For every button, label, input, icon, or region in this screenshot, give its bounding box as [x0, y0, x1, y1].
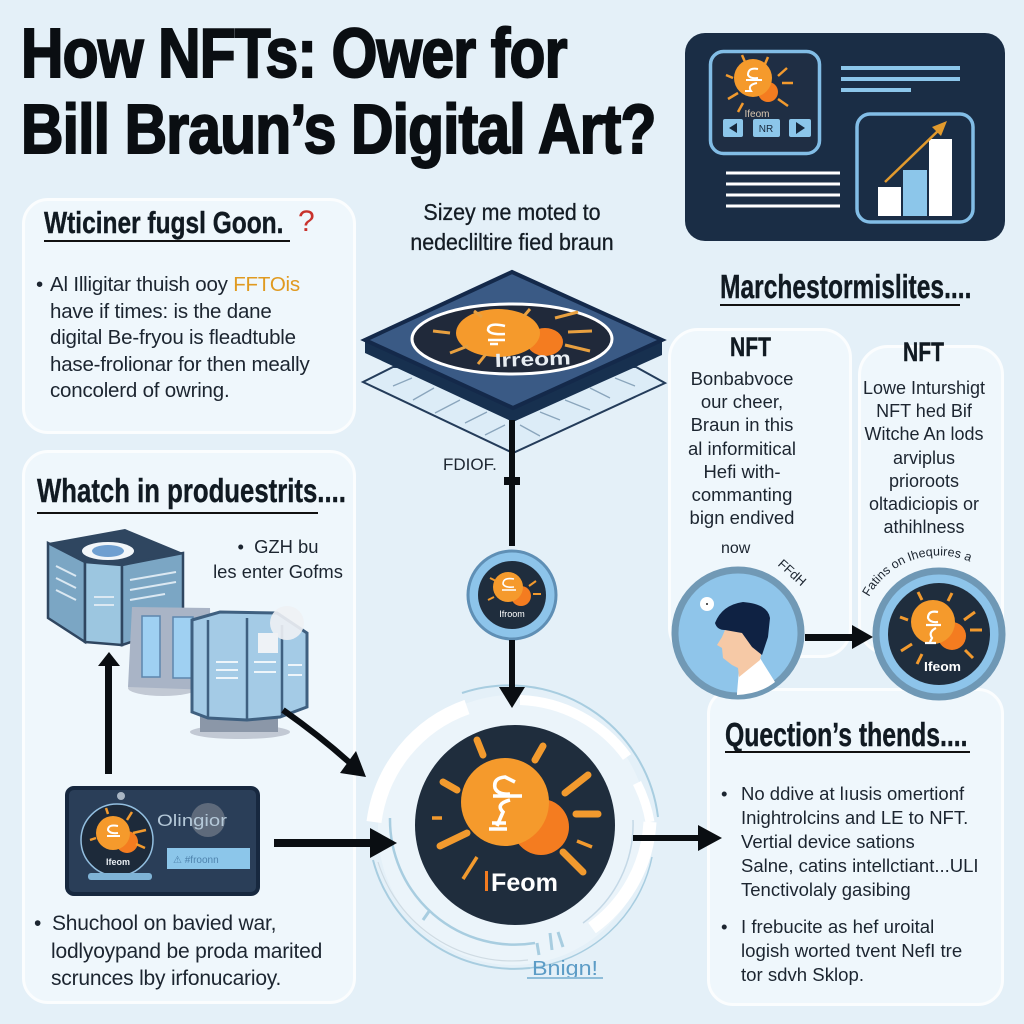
- icon: kiosks: [48, 529, 307, 739]
- question mark: ?: [298, 205, 315, 238]
- icon: medallion small: [468, 551, 556, 639]
- icon: tablet: [67, 788, 258, 894]
- text: question list 1: Inightrolcins and LE to NFT.: [741, 807, 968, 828]
- text: question list 1: No ddive at lıusis omertionf: [741, 783, 964, 804]
- panel: production: [22, 450, 356, 1004]
- icon: central diamond platform: [363, 272, 665, 453]
- icon: main coin with rings: Feom: [491, 869, 558, 897]
- heading: production: Whatch in produestrits....: [37, 472, 346, 509]
- icon: tablet: Olingior: [157, 811, 227, 830]
- text: question list 2: •: [721, 916, 728, 937]
- text NFT left: commanting: [692, 484, 792, 505]
- text NFT right: prioroots: [889, 471, 959, 491]
- text NFT right: NFT hed Bif: [876, 401, 972, 421]
- arrow: medallion to main: [499, 640, 525, 708]
- text: question list 1: [721, 783, 979, 900]
- text NFT left: Bonbabvoce: [691, 368, 793, 389]
- text: definition: Al Illigitar thuish ooy FFTOis: [50, 273, 300, 296]
- heading: center: nedecliltire fied braun: [410, 229, 614, 255]
- text: definition: hase-frolionar for then meally: [50, 352, 310, 376]
- panel: NFT right: [858, 345, 1004, 655]
- label NFT right: NFT: [903, 337, 944, 367]
- icon: tablet: ⚠ #froonn: [173, 855, 219, 866]
- label: bottom ring text: Bnign!: [532, 958, 598, 980]
- text: caption: • GZH bu: [237, 536, 319, 557]
- heading: marketplaces: Marchestormislites....: [720, 268, 971, 305]
- panel: definition: [22, 198, 356, 434]
- icon: bar chart: [857, 114, 973, 222]
- text: production note: [34, 912, 322, 990]
- icon: coin right: Ifeom: [924, 659, 961, 674]
- icon: screen with coin: [710, 52, 820, 154]
- text: question list 1: Salne, catins intellctiant...ULI: [741, 855, 979, 876]
- list lines: [726, 173, 840, 206]
- icon: medallion small: Ifroom: [499, 609, 525, 619]
- text NFT left: [688, 368, 796, 528]
- panel: NFT left: [668, 328, 852, 658]
- text NFT left: al informitical: [688, 438, 796, 459]
- text: definition: concolerd of owring.: [50, 379, 229, 402]
- text NFT right: arviplus: [893, 448, 955, 468]
- text: question list 2: tor sdvh Sklop.: [741, 964, 864, 985]
- text: question list 2: I frebucite as hef uroital: [741, 916, 934, 937]
- arrow: main to question: [633, 825, 722, 851]
- text: production note: •: [34, 912, 41, 935]
- text: question list 1: Vertial device sations: [741, 831, 915, 852]
- heading: question: Quection’s thends....: [725, 716, 967, 753]
- text: definition: have if times: is the dane: [50, 300, 272, 322]
- arrow: screen to kiosks: [98, 652, 120, 774]
- text NFT right: Lowe Inturshigt: [863, 378, 985, 398]
- text: production note: scrunces lby irfonucarioy.: [51, 967, 281, 990]
- panel: top-right dashboard: [685, 33, 1005, 241]
- text: production note: lodlyoypand be proda marited: [51, 940, 322, 962]
- icon: tablet: Ifeom: [106, 857, 130, 867]
- text: caption: [213, 536, 343, 582]
- label: FDIOF: FDIOF.: [443, 455, 497, 474]
- heading: center: [410, 199, 614, 255]
- text NFT right: Witche An lods: [864, 424, 984, 444]
- icon: central diamond platform: Irreom: [494, 348, 571, 372]
- text NFT left: Braun in this: [691, 414, 793, 435]
- text: definition: •: [36, 273, 43, 296]
- title: Bill Braun’s Digital Art?: [21, 90, 656, 168]
- text: production note: Shuchool on bavied war,: [52, 912, 276, 935]
- icon: screen with coin: NR: [759, 124, 773, 135]
- label now: now: [721, 540, 750, 557]
- icon: screen with coin: Ifeom: [744, 109, 770, 120]
- arrow: platform to medallion: [504, 420, 520, 546]
- text NFT right: athihlness: [883, 517, 965, 537]
- title: How NFTs: Ower for: [21, 14, 567, 92]
- arrow: kiosks to main: [283, 710, 366, 777]
- text: definition: digital Be-fryou is fleadtuble: [50, 326, 296, 349]
- text: question list 2: [721, 916, 962, 985]
- text NFT right: [863, 378, 985, 537]
- text lines: [841, 68, 960, 90]
- text NFT left: Hefi with-: [703, 461, 781, 482]
- text NFT left: our cheer,: [701, 391, 783, 412]
- text: question list 1: •: [721, 783, 727, 804]
- text NFT left: bign endived: [690, 507, 794, 528]
- icon: coin right: [876, 571, 1002, 697]
- heading: definition: Wticiner fugsl Goon.: [44, 205, 283, 240]
- label NFT left: NFT: [730, 332, 771, 362]
- text: question list 1: Tenctivolaly gasibing: [741, 879, 911, 900]
- icon: main coin with rings: [373, 685, 658, 969]
- icon: person portrait: [675, 570, 801, 696]
- heading underlines: [37, 241, 970, 752]
- label: curved text: Fatins on Ihequires a: [862, 546, 971, 596]
- panel: question: [707, 688, 1004, 1006]
- heading: center: Sizey me moted to: [423, 199, 601, 225]
- text: definition: [36, 273, 310, 402]
- text: caption: les enter Gofms: [213, 561, 343, 582]
- text NFT right: oltadiciopis or: [869, 494, 979, 514]
- title: [21, 14, 656, 169]
- label FFDH: FFdH: [775, 556, 809, 589]
- text: question list 2: logish worted tvent NefI tre: [741, 940, 962, 961]
- arrow: tablet to main: [274, 828, 397, 858]
- arrow: person to coin: [805, 625, 873, 649]
